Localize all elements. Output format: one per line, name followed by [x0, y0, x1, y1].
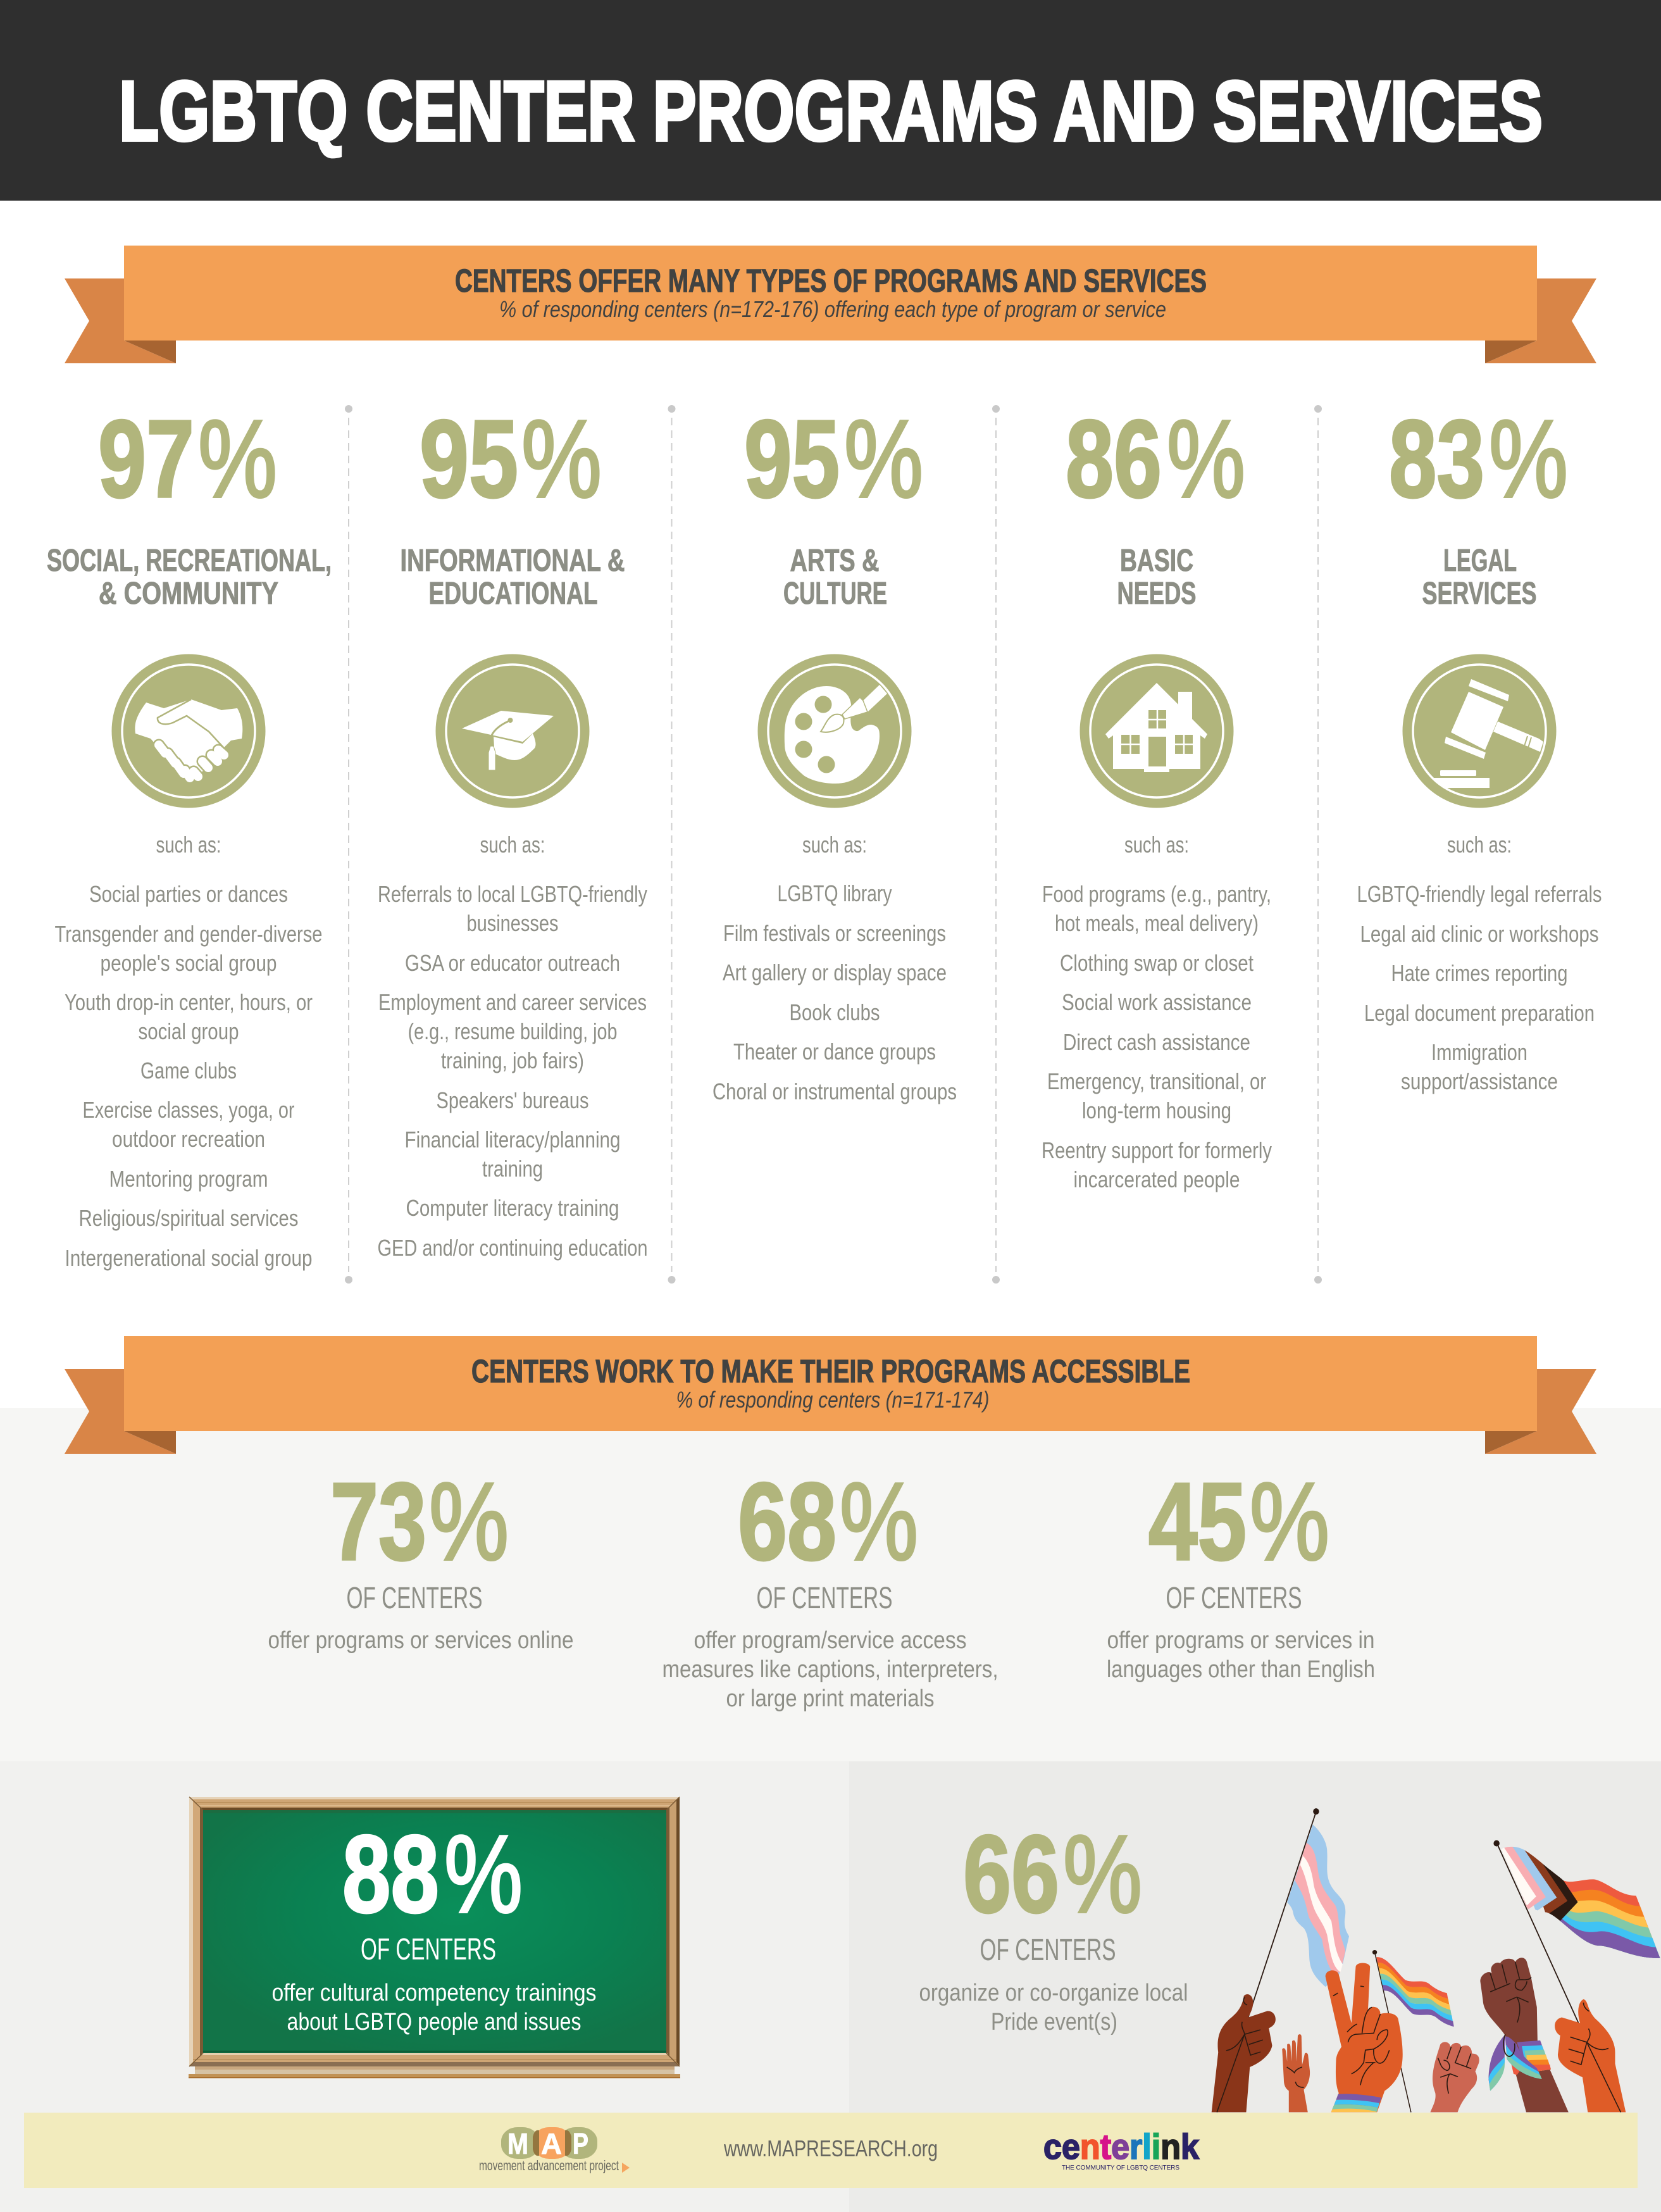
stat block: 68% access measures: % — [840, 1459, 918, 1583]
heading: ARTS & — [790, 544, 880, 578]
examples list: LGBTQ library — [777, 880, 892, 906]
logo: movement advancement project — [479, 2127, 630, 2173]
stat block: 66% pride events: organize or co-organize local — [919, 1980, 1188, 2006]
logo: centerlink: centerlink — [1043, 2127, 1200, 2166]
stat 83%: 83 — [1389, 397, 1484, 520]
examples list: Game clubs — [140, 1058, 237, 1084]
examples list: incarcerated people — [1073, 1166, 1240, 1192]
stat block: 45% languages — [1107, 1459, 1375, 1683]
panel: accessibility background — [0, 1408, 1661, 1761]
examples list: outdoor recreation — [112, 1126, 265, 1152]
stat block: 45% languages: OF CENTERS — [1166, 1582, 1302, 1615]
examples list: such as: — [1124, 832, 1189, 858]
heading: & COMMUNITY — [99, 577, 278, 611]
examples list: support/assistance — [1401, 1068, 1558, 1094]
stat 86%: % — [1167, 397, 1245, 520]
stat block: 45% languages: 45 — [1148, 1459, 1247, 1583]
stat block: 66% pride events — [919, 1812, 1188, 2035]
examples list: Food programs (e.g., pantry, — [1042, 881, 1271, 907]
panel: pride right background — [849, 1761, 1661, 2212]
examples list — [54, 832, 323, 1271]
panel: basic needs — [1042, 397, 1272, 1192]
hand: pink fist — [1430, 2042, 1479, 2112]
examples list: Religious/spiritual services — [78, 1205, 299, 1231]
examples list: Social work assistance — [1062, 989, 1252, 1015]
flag: small rainbow — [1372, 1950, 1454, 2112]
examples list: training — [482, 1156, 543, 1182]
stat 95% — [420, 397, 602, 520]
examples list: social group — [138, 1018, 239, 1044]
examples list: Immigration — [1431, 1039, 1527, 1065]
icon: house — [1079, 654, 1234, 808]
stat block: 68% access measures: or large print materials — [726, 1685, 934, 1712]
panel: informational and educational — [377, 397, 648, 1261]
footer band — [24, 2113, 1638, 2188]
heading: BASIC — [1120, 544, 1193, 578]
stat block: 68% access measures: OF CENTERS — [757, 1582, 892, 1615]
stat 86%: 86 — [1066, 397, 1162, 520]
examples list: LGBTQ-friendly legal referrals — [1357, 881, 1602, 907]
examples list: Transgender and gender-diverse — [54, 921, 323, 947]
chalkboard text — [272, 1933, 596, 2035]
examples list: Referrals to local LGBTQ-friendly — [378, 881, 647, 907]
stat block: 66% pride events: 66 — [963, 1812, 1059, 1935]
stat 97% — [98, 397, 277, 520]
stat 97%: % — [198, 397, 277, 520]
examples list — [377, 832, 648, 1261]
heading: SOCIAL, RECREATIONAL, — [47, 544, 332, 578]
stat block: 66% pride events: Pride event(s) — [991, 2009, 1117, 2035]
examples list: Computer literacy training — [406, 1195, 619, 1221]
examples list: such as: — [802, 832, 867, 858]
icon: gavel — [1402, 654, 1557, 808]
hand: small open palm — [1282, 2034, 1310, 2112]
examples list: such as: — [156, 832, 221, 858]
examples list: Theater or dance groups — [733, 1039, 936, 1065]
stat block: 68% access measures: measures like captions, interpreters, — [662, 1656, 998, 1683]
stat block: 73% online: offer programs or services online — [268, 1627, 573, 1654]
examples list: Hate crimes reporting — [1391, 960, 1568, 986]
panel: legal services — [1357, 397, 1602, 1094]
chalkboard text: offer cultural competency trainings — [272, 1980, 596, 2006]
stat 83% — [1389, 397, 1568, 520]
panel: social, recreational, community — [47, 397, 332, 1271]
icon: handshake — [111, 654, 266, 808]
examples list: GSA or educator outreach — [405, 950, 620, 976]
heading: NEEDS — [1117, 577, 1196, 611]
logo: movement advancement project: A — [541, 2127, 562, 2160]
examples list: Legal aid clinic or workshops — [1360, 921, 1598, 947]
hand: peace sign with wristband — [1326, 1963, 1403, 2112]
stat 97%: 97 — [98, 397, 194, 520]
hand: brown fist with bandana — [1480, 1958, 1569, 2112]
banner: centers offer many types: % of responding centers (n=172-176) offering each type of program or service — [499, 296, 1166, 322]
examples list: Legal document preparation — [1364, 1000, 1595, 1026]
heading: INFORMATIONAL & — [400, 544, 625, 578]
stat 86% — [1066, 397, 1245, 520]
panel: arts and culture — [712, 397, 957, 1104]
stat block: 73% online — [268, 1459, 573, 1654]
examples list: Direct cash assistance — [1063, 1029, 1250, 1055]
stat block: 68% access measures: offer program/service access — [694, 1627, 967, 1654]
chalkboard — [189, 1797, 680, 2078]
heading — [1117, 544, 1196, 611]
examples list: Speakers' bureaus — [437, 1087, 588, 1113]
examples list: Exercise classes, yoga, or — [82, 1097, 295, 1123]
stat block: 73% online: 73 — [330, 1459, 426, 1583]
examples list: people's social group — [100, 950, 277, 976]
examples list: Social parties or dances — [89, 881, 288, 907]
stat 88%: % — [444, 1812, 523, 1935]
stat 95%: % — [521, 397, 602, 520]
stat block: 68% access measures — [662, 1459, 998, 1712]
stat block: 45% languages: languages other than English — [1107, 1656, 1375, 1683]
examples list: Mentoring program — [109, 1166, 268, 1192]
heading — [400, 544, 625, 611]
stat block: 68% access measures: 68 — [738, 1459, 837, 1583]
examples list: training, job fairs) — [441, 1047, 584, 1073]
icon: palette — [758, 654, 911, 808]
website: www.MAPRESEARCH.org — [723, 2135, 938, 2161]
heading: LEGAL — [1443, 544, 1517, 578]
examples list: Youth drop-in center, hours, or — [65, 989, 313, 1015]
examples list: Choral or instrumental groups — [712, 1078, 957, 1104]
stat block: 45% languages: % — [1250, 1459, 1329, 1583]
examples list: such as: — [480, 832, 545, 858]
heading — [47, 544, 332, 611]
examples list: businesses — [467, 910, 558, 936]
banner: centers offer many types — [65, 246, 1596, 363]
examples list: Employment and career services — [378, 989, 647, 1015]
banner: centers offer many types: CENTERS OFFER MANY TYPES OF PROGRAMS AND SERVICES — [455, 263, 1207, 299]
logo: movement advancement project: P — [573, 2127, 588, 2160]
examples list — [712, 832, 957, 1104]
stat block: 66% pride events: OF CENTERS — [980, 1934, 1116, 1967]
stat 83%: % — [1489, 397, 1568, 520]
stat block: 73% online: OF CENTERS — [347, 1582, 482, 1615]
examples list: Art gallery or display space — [723, 959, 947, 985]
examples list: Financial literacy/planning — [405, 1127, 620, 1153]
examples list: GED and/or continuing education — [377, 1235, 648, 1261]
hand: orange holding flag — [1555, 1999, 1626, 2112]
hand: dark brown holding flag — [1212, 1994, 1276, 2112]
stat block: 73% online: % — [429, 1459, 509, 1583]
stat block: 66% pride events: % — [1063, 1812, 1142, 1935]
logo: movement advancement project: M — [507, 2127, 528, 2160]
examples list: such as: — [1447, 832, 1512, 858]
panel: training left background — [0, 1761, 849, 2212]
stat 95%: 95 — [744, 397, 840, 520]
flag: transgender — [1248, 1808, 1349, 2017]
examples list — [1042, 832, 1272, 1192]
heading: EDUCATIONAL — [429, 577, 597, 611]
flag: progress pride — [1493, 1840, 1660, 2023]
examples list: long-term housing — [1082, 1097, 1231, 1123]
icon: graduation cap — [435, 654, 590, 808]
heading — [783, 544, 887, 611]
stat 95%: % — [844, 397, 923, 520]
chalkboard text: OF CENTERS — [361, 1933, 496, 1966]
illustration: raised hands with pride flags — [1212, 1808, 1660, 2112]
heading: CULTURE — [783, 577, 887, 611]
column dividers — [345, 405, 1322, 1284]
logo: movement advancement project: movement advancement project — [479, 2158, 619, 2173]
stat 95% — [744, 397, 923, 520]
stat 88% — [342, 1812, 523, 1935]
examples list: Book clubs — [790, 999, 880, 1025]
heading — [1422, 544, 1536, 611]
examples list — [1357, 832, 1602, 1094]
examples list: Clothing swap or closet — [1060, 950, 1254, 976]
heading: SERVICES — [1422, 577, 1536, 611]
examples list: Emergency, transitional, or — [1047, 1068, 1266, 1094]
banner: centers work to make programs accessible — [65, 1336, 1596, 1454]
header band — [0, 0, 1661, 201]
banner: centers work to make programs accessible: % of responding centers (n=171-174) — [676, 1387, 990, 1413]
stat block: 45% languages: offer programs or services in — [1107, 1627, 1374, 1654]
banner: centers work to make programs accessible: CENTERS WORK TO MAKE THEIR PROGRAMS ACCESSIBLE — [471, 1353, 1190, 1389]
chalkboard text: about LGBTQ people and issues — [287, 2009, 581, 2035]
examples list: (e.g., resume building, job — [407, 1018, 618, 1044]
examples list: Film festivals or screenings — [723, 920, 946, 946]
stat 95%: 95 — [420, 397, 518, 520]
stat 88%: 88 — [342, 1812, 439, 1935]
examples list: Reentry support for formerly — [1042, 1137, 1272, 1163]
examples list: Intergenerational social group — [65, 1245, 313, 1271]
examples list: hot meals, meal delivery) — [1055, 910, 1259, 936]
logo: centerlink: THE COMMUNITY OF LGBTQ CENTERS — [1062, 2165, 1179, 2171]
